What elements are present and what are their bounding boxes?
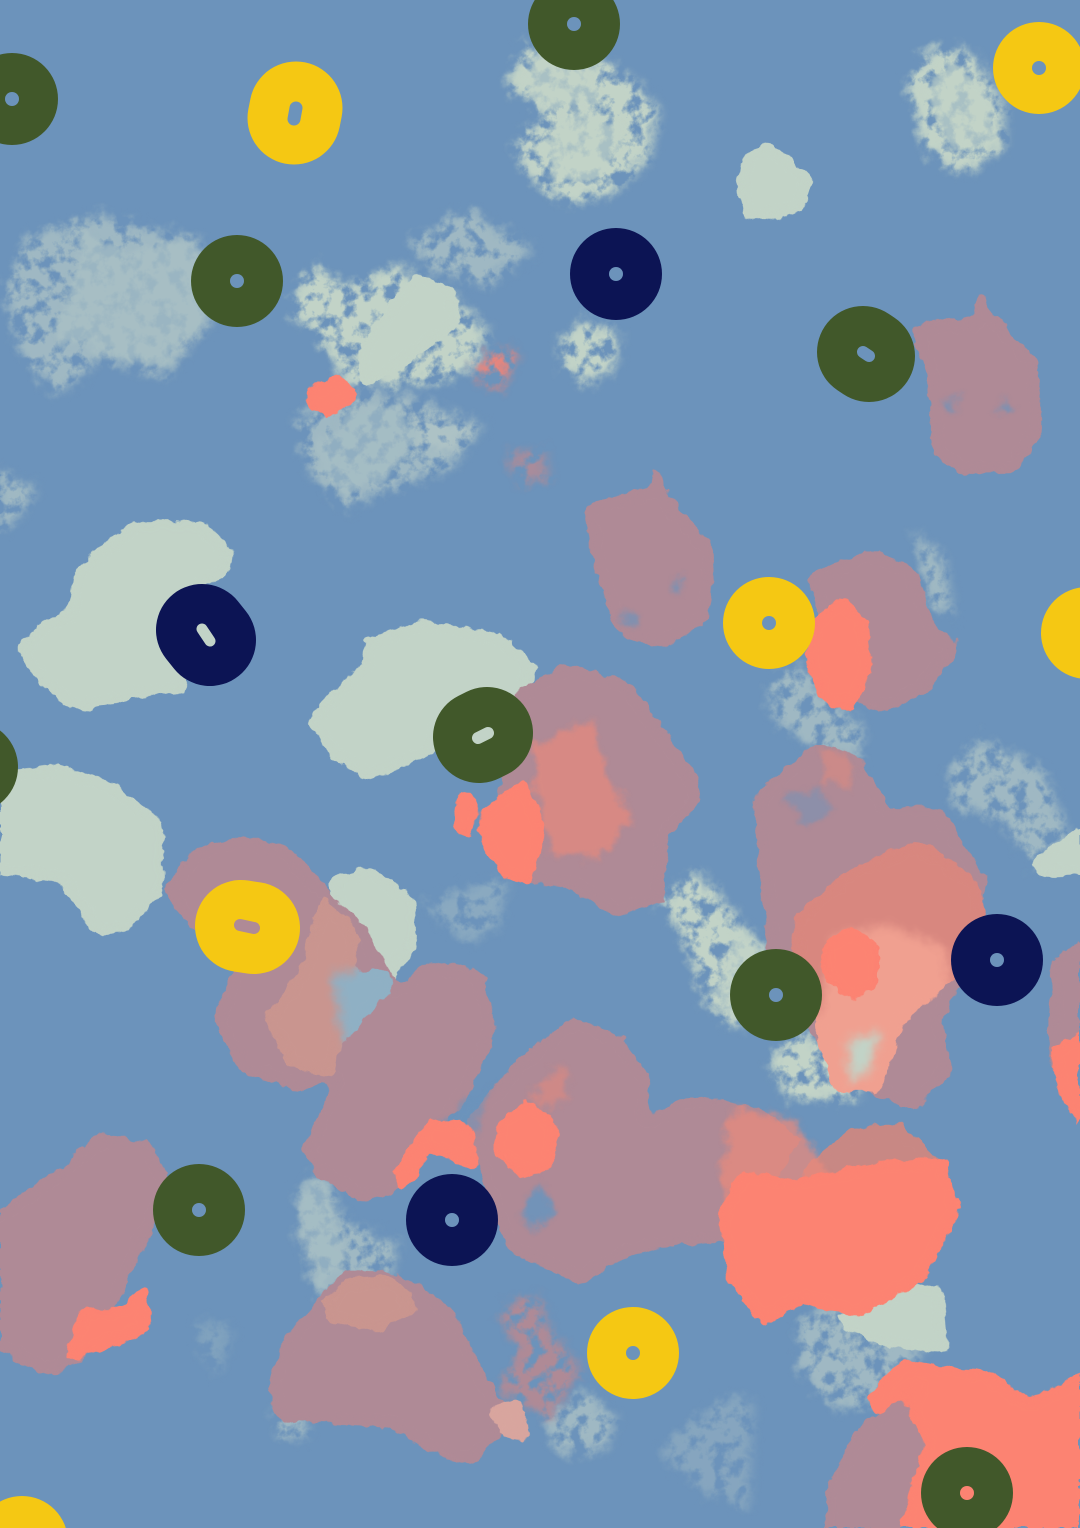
ring: yellow centre right (723, 577, 815, 669)
ring: navy lower centre (406, 1174, 498, 1266)
ring: green upper left (191, 235, 283, 327)
ring: yellow lower centre (587, 1307, 679, 1399)
faint holes in mauve blobs (440, 399, 1014, 1228)
ring: yellow right edge (1041, 587, 1080, 679)
blended salmon overlaps (263, 840, 987, 1442)
ring: green top centre (528, 0, 620, 70)
ring: green centre (478, 733, 488, 738)
coral dabs over mauve (535, 720, 855, 1230)
ring: yellow left (240, 925, 254, 928)
ring: navy right (951, 914, 1043, 1006)
ring: navy upper centre (570, 228, 662, 320)
ring: yellow top left (294, 108, 296, 119)
ring: green lower left (153, 1164, 245, 1256)
ring: yellow top right (993, 22, 1080, 114)
ring: green bottom right (921, 1447, 1013, 1528)
mint blobs (0, 142, 1080, 1354)
ring: navy left (202, 629, 210, 641)
ring: green left edge (0, 721, 18, 813)
ring: green right (730, 949, 822, 1041)
ring: green top left (0, 53, 58, 145)
ring: yellow bottom left (0, 1496, 68, 1528)
soft solid centres of faded blobs (55, 50, 1000, 1295)
ring: green upper right (863, 352, 869, 356)
coral blobs (64, 375, 1080, 1528)
